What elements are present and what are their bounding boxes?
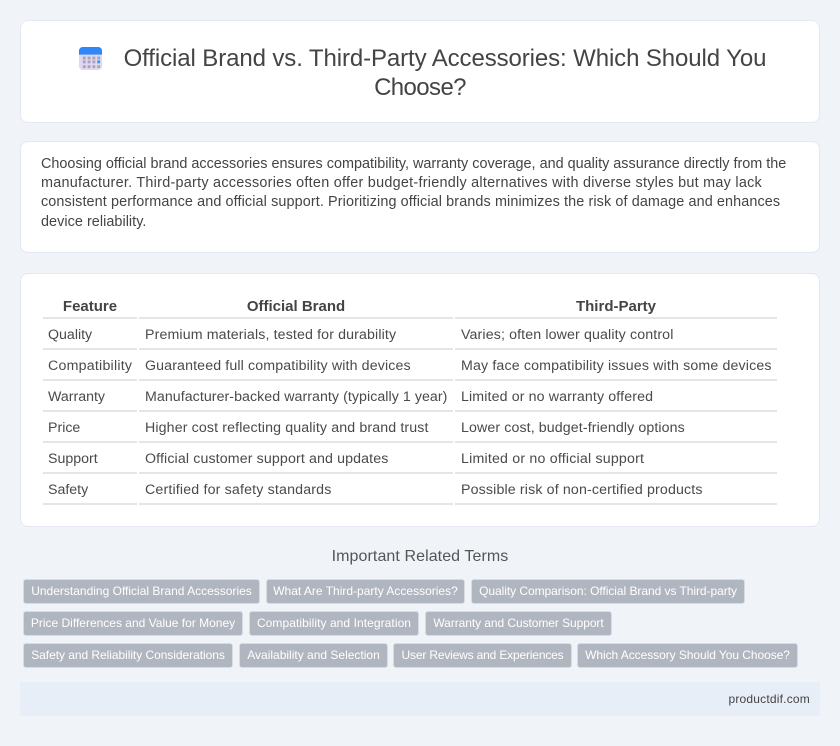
related terms tags: Compatibility and Integration	[257, 616, 411, 630]
related terms tags: User Reviews and Experiences	[402, 648, 563, 662]
intro text: manufacturer. Third-party accessories often offer budget-friendly alternatives with diverse styles but may lack	[41, 175, 762, 191]
intro text: Choosing official brand accessories ensures compatibility, warranty coverage, and quality assurance directly from the	[41, 156, 786, 172]
title: Official Brand vs. Third-Party Accessories: Which Should You	[124, 45, 766, 72]
comparison table: Possible risk of non-certified products	[461, 482, 703, 498]
comparison table: Premium materials, tested for durability	[145, 327, 396, 343]
comparison table: Warranty	[48, 389, 105, 405]
comparison table: Support	[48, 451, 98, 467]
related terms tags: Safety and Reliability Considerations	[31, 648, 225, 662]
comparison table: Official customer support and updates	[145, 451, 389, 467]
related terms tags: Availability and Selection	[247, 648, 380, 662]
table header: Third-Party	[576, 298, 656, 315]
related terms tags: Quality Comparison: Official Brand vs Third-party	[479, 584, 737, 598]
related terms heading: Important Related Terms	[332, 548, 508, 565]
table header: Official Brand	[247, 298, 345, 315]
comparison table: Certified for safety standards	[145, 482, 331, 498]
table header: Feature	[63, 298, 117, 315]
comparison table: Compatibility	[48, 358, 132, 374]
comparison table: Manufacturer-backed warranty (typically 1 year)	[145, 389, 447, 405]
comparison table: Price	[48, 420, 80, 436]
comparison table: Higher cost reflecting quality and brand trust	[145, 420, 429, 436]
footer bar	[20, 682, 820, 716]
related terms tags: Price Differences and Value for Money	[31, 616, 235, 630]
comparison table: Limited or no warranty offered	[461, 389, 653, 405]
related terms tags: Warranty and Customer Support	[433, 616, 604, 630]
comparison table: Safety	[48, 482, 88, 498]
comparison table: Varies; often lower quality control	[461, 327, 673, 343]
comparison table: Guaranteed full compatibility with devices	[145, 358, 411, 374]
table panel	[20, 273, 820, 527]
header panel	[20, 20, 820, 123]
comparison table	[43, 298, 777, 505]
comparison table: Quality	[48, 327, 92, 343]
related terms tags	[23, 579, 798, 668]
title line 2: Choose?	[374, 74, 466, 101]
icon: calendar	[78, 47, 102, 70]
footer text: productdif.com	[728, 692, 810, 706]
related terms tags: What Are Third-party Accessories?	[273, 584, 458, 598]
intro text: device reliability.	[41, 214, 146, 230]
intro text	[41, 156, 786, 230]
comparison table: May face compatibility issues with some devices	[461, 358, 772, 374]
intro text: consistent performance and official support. Prioritizing official brands minimizes the risk of damage and enhances	[41, 194, 780, 210]
related terms tags: Understanding Official Brand Accessories	[31, 584, 252, 598]
comparison table: Lower cost, budget-friendly options	[461, 420, 685, 436]
table header	[63, 298, 656, 315]
comparison table: Limited or no official support	[461, 451, 644, 467]
intro panel	[20, 141, 820, 253]
related terms tags: Which Accessory Should You Choose?	[585, 648, 790, 662]
